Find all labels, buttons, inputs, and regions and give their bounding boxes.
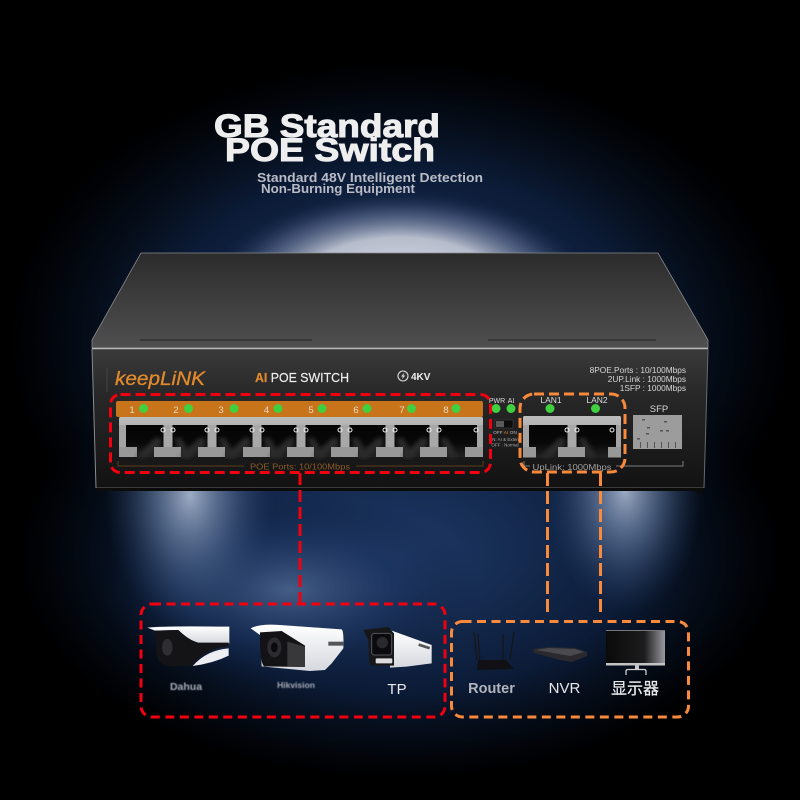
Router label: Router [468,681,515,697]
orange port number strip: 4 [264,405,269,416]
red connector line [298,473,302,604]
status LEDs and AI switch: ON: AI & Extend [489,437,522,442]
Dahua label: Dahua [170,681,202,693]
status LEDs and AI switch: AI [508,398,514,405]
orange dashed highlight: LAN ports [520,394,625,472]
orange port number strip [116,401,483,417]
icon: router [474,632,514,670]
subtitle: Standard 48V Intelligent Detection [257,171,483,185]
NVR label: NVR [549,680,581,697]
icon: lightning 4KV: 4KV [411,372,431,383]
orange port number strip: 7 [399,405,405,416]
product name: AI POE SWITCH [255,370,349,385]
specifications text: 2UP.Link : 1000Mbps [608,374,686,384]
subtitle: Non-Burning Equipment [261,182,416,196]
switch front panel [92,340,708,494]
icon: monitor [606,630,665,675]
icon: Hikvision camera [251,625,343,671]
switch top lid [92,253,708,348]
LAN ports: LAN1 [540,395,562,405]
subtitle [257,171,483,196]
POE ports bracket label: POE Ports: 10/100Mbps [250,462,350,472]
SFP port [633,404,682,449]
display label: 显示器 [611,680,659,698]
orange port number strip: 2 [173,405,179,416]
status LEDs and AI switch: PWR [489,398,505,405]
status LEDs and AI switch: OFF : Normal [491,442,519,448]
POE ports [119,417,483,457]
SFP port: SFP [650,404,668,415]
panel: uplink devices [452,622,688,717]
specifications text: 8POE.Ports : 10/100Mbps [590,365,686,375]
brand logo: keepLiNK [115,369,206,390]
icon: Dahua camera [147,626,229,666]
orange port number strip: 5 [308,405,314,416]
status LEDs and AI switch: OFF AI ON [493,430,517,436]
LAN ports [523,395,621,458]
POE ports bracket label [118,461,483,472]
icon: TP camera [363,627,432,668]
title: GB Standard [214,108,440,144]
title [214,108,440,168]
icon: NVR [533,647,587,662]
status LEDs and AI switch [489,398,522,448]
orange port number strip: 1 [129,405,135,416]
orange port number strip: 8 [443,405,449,416]
specifications text [590,365,686,393]
switch body [92,253,708,494]
title: POE Switch [225,132,435,168]
panel: cameras [141,604,445,717]
TP label: TP [387,681,407,698]
orange port number strip: 3 [218,405,224,416]
red dashed highlight: POE ports [110,394,490,472]
orange port number strip: 6 [353,405,359,416]
specifications text: 1SFP : 1000Mbps [620,383,686,393]
orange connector lines [548,473,600,614]
Hikvision label: Hikvision [277,680,315,690]
icon: lightning 4KV [398,371,431,383]
LAN ports: LAN2 [586,395,608,405]
uplink bracket label [524,461,683,472]
uplink bracket label: UpLink: 1000Mbps [532,462,612,472]
